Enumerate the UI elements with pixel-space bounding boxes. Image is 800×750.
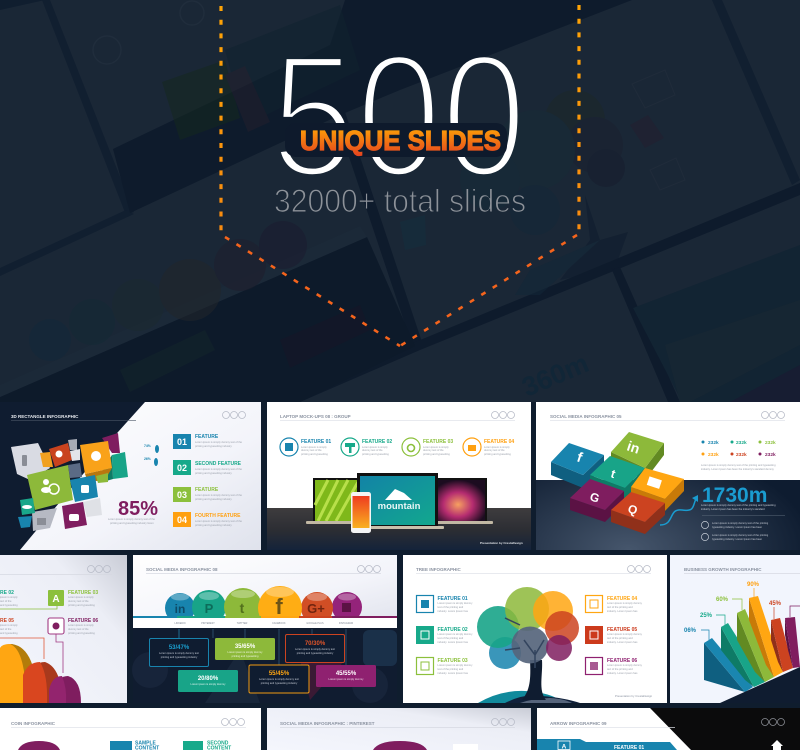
coloured rule under spheres bbox=[133, 616, 397, 628]
four feature icons: dummy text of the bbox=[423, 448, 444, 452]
numbered feature list: printing and typesetting industry. bbox=[195, 523, 232, 527]
percentage boxes with connectors: Lorem ipsum is simply dummy bbox=[329, 677, 364, 681]
slide: social media infographic 05: SOCIAL MEDIA INFOGRAPHIC 05 bbox=[550, 414, 622, 419]
slide: pinterest infographic: SOCIAL MEDIA INFOGRAPHIC : PINTEREST bbox=[280, 721, 375, 726]
four feature icons: printing and typesetting bbox=[423, 452, 450, 456]
stat values grid: 232k bbox=[708, 452, 719, 458]
faint icons in dark area bbox=[132, 630, 397, 703]
slide: 3D rectangle infographic: printing and typesetting industry lorem bbox=[110, 521, 154, 525]
slide: social media infographic 08: PINTEREST bbox=[201, 622, 215, 625]
isometric social blocks: G bbox=[588, 490, 601, 506]
right features: text of the printing and bbox=[607, 605, 633, 609]
slide: cropped features with 3D arcs: printing and typesetting bbox=[68, 603, 95, 607]
slide: cropped features with 3D arcs: and typesetting bbox=[0, 631, 18, 635]
numbered feature list bbox=[173, 434, 243, 527]
slide: social media infographic 05: Lorem ipsum is simply dummy text of the printing and typesetting bbox=[701, 503, 776, 507]
laptops and phone: mountain bbox=[378, 501, 421, 512]
slide: business growth infographic bbox=[670, 555, 800, 703]
left features: FEATURE 02 bbox=[438, 627, 468, 633]
four feature icons: FEATURE 04 bbox=[484, 439, 514, 445]
tree illustration bbox=[477, 587, 580, 703]
numbered feature list: 04 bbox=[177, 515, 187, 525]
big stat 1730m: 1730m bbox=[702, 484, 767, 507]
four feature icons: printing and typesetting bbox=[484, 452, 511, 456]
growth labels: 45% bbox=[769, 601, 782, 607]
right features: Lorem ipsum is simply dummy bbox=[607, 601, 643, 605]
left features bbox=[416, 596, 473, 675]
left features: industry. Lorem Ipsum has bbox=[438, 609, 469, 613]
right features: industry. Lorem Ipsum has bbox=[607, 671, 638, 675]
numbered feature list: FEATURE bbox=[195, 487, 219, 493]
percentage boxes with connectors: 55/45% bbox=[269, 671, 290, 677]
left features: FEATURE 03 bbox=[438, 658, 468, 664]
four feature icons: FEATURE 03 bbox=[423, 439, 453, 445]
right features bbox=[585, 596, 643, 675]
numbered feature list: printing and typesetting industry. bbox=[195, 497, 232, 501]
slide: social media infographic 08: INSTAGRAM bbox=[339, 622, 353, 625]
slide: cropped features with 3D arcs: printing and typesetting bbox=[68, 631, 95, 635]
slide: laptop mock-ups: LAPTOP MOCK-UPS 08 : GROUP bbox=[280, 414, 351, 419]
background right slide bbox=[634, 246, 799, 385]
right features: industry. Lorem Ipsum has bbox=[607, 609, 638, 613]
slide: social media infographic 05: Lorem ipsum is simply dummy text of the printing and typesetting bbox=[701, 463, 776, 467]
slide: cropped features with 3D arcs: text of the bbox=[0, 627, 12, 631]
glossy social spheres: G+ bbox=[307, 601, 325, 616]
right features: Lorem ipsum is simply dummy bbox=[607, 632, 643, 636]
stat values grid: 232k bbox=[765, 440, 776, 446]
numbered feature list: printing and typesetting industry. bbox=[195, 471, 232, 475]
right features: FEATURE 05 bbox=[607, 627, 637, 633]
slide: social media infographic 05: industry. Lorem Ipsum has been the industry's standard bbox=[701, 507, 765, 511]
background: dimmed tilted slides collage bbox=[0, 0, 800, 403]
percentage boxes with connectors: 20/80% bbox=[198, 676, 219, 682]
percentage boxes with connectors: Lorem ipsum is simply dummy bbox=[191, 682, 226, 686]
numbered feature list: SECOND FEATURE bbox=[195, 461, 242, 467]
numbered feature list: Lorem ipsum is simply dummy text of the bbox=[195, 440, 243, 444]
slide: coin infographic: SECOND bbox=[207, 740, 229, 746]
four feature icons: dummy text of the bbox=[362, 448, 383, 452]
slide: laptop mock-ups bbox=[267, 402, 531, 550]
background label: 360m: 360m bbox=[518, 348, 593, 403]
badge: unique slides: UNIQUE SLIDES bbox=[300, 125, 501, 156]
slide: cropped features with 3D arcs: RE 05 bbox=[0, 618, 14, 624]
slide: social media infographic 08: FACEBOOK bbox=[272, 622, 286, 625]
big number 500: 500 bbox=[271, 17, 526, 213]
glossy social spheres: in bbox=[175, 602, 185, 616]
numbered feature list: Lorem ipsum is simply dummy text of the bbox=[195, 467, 243, 471]
slide: cropped features with 3D arcs: and typesetting bbox=[0, 603, 18, 607]
numbered feature list: Lorem ipsum is simply dummy text of the bbox=[195, 519, 243, 523]
slide: coin infographic bbox=[0, 708, 261, 750]
glossy social spheres: f bbox=[275, 594, 283, 619]
background dim accents bbox=[162, 60, 270, 321]
slide: arrow infographic: ARROW INFOGRAPHIC 09 bbox=[550, 721, 607, 726]
background faint icon circles bbox=[93, 1, 204, 64]
numbered feature list: 03 bbox=[177, 490, 187, 500]
stats with person icons: 74% bbox=[144, 444, 151, 448]
stat values grid: 232k bbox=[708, 440, 719, 446]
left features: FEATURE 01 bbox=[438, 596, 468, 602]
glossy social spheres bbox=[165, 586, 362, 616]
percentage boxes with connectors: printing and typesetting bbox=[232, 654, 259, 658]
four feature icons bbox=[280, 438, 514, 456]
numbered feature list: Lorem ipsum is simply dummy text of the bbox=[195, 493, 243, 497]
right features: Lorem ipsum is simply dummy bbox=[607, 663, 643, 667]
right features: text of the printing and bbox=[607, 667, 633, 671]
slide: tree infographic bbox=[403, 555, 667, 703]
left features: Lorem ipsum is simply dummy bbox=[438, 632, 473, 636]
slide: pinterest infographic bbox=[267, 708, 531, 750]
slide: social media infographic 08: GOOGLE PLUS bbox=[306, 622, 324, 625]
four feature icons: FEATURE 02 bbox=[362, 439, 392, 445]
slide: social media infographic 05: Lorem ipsum is simply dummy text of the printing bbox=[712, 533, 769, 537]
four feature icons: dummy text of the bbox=[484, 448, 505, 452]
stat values grid: 232k bbox=[736, 440, 747, 446]
growth labels bbox=[684, 582, 800, 640]
slide: tree infographic: TREE INFOGRAPHIC bbox=[416, 567, 462, 572]
slide: cropped features with 3D arcs: text of the bbox=[0, 599, 12, 603]
left features: text of the printing and bbox=[438, 636, 464, 640]
right features: FEATURE 04 bbox=[607, 596, 637, 602]
growth labels: 90% bbox=[747, 582, 760, 588]
percentage boxes with connectors: Lorem ipsum is simply dummy text bbox=[295, 647, 335, 651]
right features: industry. Lorem Ipsum has bbox=[607, 640, 638, 644]
left features: text of the printing and bbox=[438, 605, 464, 609]
four feature icons: Lorem ipsum is simply bbox=[301, 445, 327, 449]
percentage boxes with connectors: Lorem ipsum is simply dummy text bbox=[259, 677, 299, 681]
percentage boxes with connectors: 45/55% bbox=[336, 671, 357, 677]
growth labels: 06% bbox=[684, 628, 697, 634]
slide: cropped features with 3D arcs: ipsum is simply bbox=[0, 595, 18, 599]
isometric social blocks: t bbox=[609, 467, 617, 481]
left features: industry. Lorem Ipsum has bbox=[438, 640, 469, 644]
four feature icons: Lorem ipsum is simply bbox=[484, 445, 510, 449]
growth labels: 25% bbox=[700, 613, 713, 619]
right features: FEATURE 06 bbox=[607, 658, 637, 664]
slide: business growth infographic: BUSINESS GROWTH INFOGRAPHIC bbox=[684, 567, 762, 572]
slide: social media infographic 08 bbox=[132, 555, 397, 703]
laptops and phone bbox=[306, 473, 493, 533]
slide: cropped features with 3D arcs: dummy text of the bbox=[68, 627, 89, 631]
numbered feature list: 02 bbox=[177, 463, 187, 473]
slide: social media infographic 08: LINKEDIN bbox=[174, 622, 186, 625]
slide: social media infographic 05: industry. Lorem Ipsum has been the industry's standard dummy bbox=[701, 467, 775, 471]
3D growth bars bbox=[704, 596, 800, 692]
left features: text of the printing and bbox=[438, 667, 464, 671]
stats with person icons bbox=[144, 444, 159, 466]
slide: cropped features with 3D arcs: Lorem ipsum is simply bbox=[68, 595, 94, 599]
four feature icons: printing and typesetting bbox=[362, 452, 389, 456]
slide: cropped features with 3D arcs: Lorem ipsum is simply bbox=[68, 623, 94, 627]
slide: cropped features with 3D arcs: dummy text of the bbox=[68, 599, 89, 603]
percentage boxes with connectors: printing and typesetting industry bbox=[261, 681, 298, 685]
slide: social media infographic 08: SOCIAL MEDIA INFOGRAPHIC 08 bbox=[146, 567, 218, 572]
stat values grid bbox=[702, 440, 776, 458]
glossy social spheres: t bbox=[240, 600, 245, 616]
slide: 3D rectangle infographic bbox=[0, 402, 261, 550]
percentage boxes with connectors: 70/30% bbox=[305, 641, 326, 647]
stat values grid: 232k bbox=[765, 452, 776, 458]
slide: coin infographic: COIN INFOGRAPHIC bbox=[11, 721, 56, 726]
numbered feature list: FOURTH FEATURE bbox=[195, 513, 241, 519]
slide: social media infographic 05: typesetting industry. Lorem Ipsum has been bbox=[712, 537, 763, 541]
slide: laptop mock-ups: Presentation by CrestaDesign bbox=[480, 541, 523, 545]
left features: industry. Lorem Ipsum has bbox=[438, 671, 469, 675]
slide: coin infographic: SAMPLE bbox=[135, 740, 156, 746]
four feature icons: printing and typesetting bbox=[301, 452, 328, 456]
dashed shield outline bbox=[221, 5, 579, 346]
right features: text of the printing and bbox=[607, 636, 633, 640]
numbered feature list: 01 bbox=[177, 437, 187, 447]
growth arrow bbox=[660, 495, 698, 525]
slide: cropped features with 3D arcs: RE 02 bbox=[0, 590, 14, 596]
stat values grid: 232k bbox=[736, 452, 747, 458]
slide: arrow infographic bbox=[537, 708, 800, 750]
numbered feature list: FEATURE bbox=[195, 434, 219, 440]
slide: cropped features with 3D arcs: FEATURE 03 bbox=[68, 590, 98, 596]
percentage boxes with connectors: 35/65% bbox=[235, 644, 256, 650]
big stat 85%: 85% bbox=[118, 498, 158, 520]
slide: cropped features with 3D arcs: ipsum is simply bbox=[0, 623, 18, 627]
bottom row of cropped slides bbox=[0, 708, 800, 750]
slide: 3D rectangle infographic: Lorem ipsum is simply dummy text of the bbox=[108, 517, 156, 521]
numbered feature list: printing and typesetting industry. bbox=[195, 444, 232, 448]
percentage boxes with connectors: 53/47% bbox=[169, 645, 190, 651]
slide: social media infographic 05: typesetting industry. Lorem Ipsum has been bbox=[712, 525, 763, 529]
growth labels: 60% bbox=[716, 597, 729, 603]
percentage boxes with connectors: Lorem ipsum is simply dummy bbox=[228, 650, 263, 654]
four feature icons: Lorem ipsum is simply bbox=[362, 445, 388, 449]
slide: 3D rectangle infographic: 3D RECTANGLE INFOGRAPHIC bbox=[11, 414, 79, 419]
subtitle: 32000+ total slides bbox=[274, 183, 526, 219]
percentage boxes with connectors: Lorem ipsum is simply dummy text bbox=[159, 651, 199, 655]
four feature icons: Lorem ipsum is simply bbox=[423, 445, 449, 449]
four feature icons: dummy text of the bbox=[301, 448, 322, 452]
left features: Lorem ipsum is simply dummy bbox=[438, 663, 473, 667]
slide: social media infographic 05 bbox=[536, 402, 800, 550]
slide: cropped features with 3D arcs: A bbox=[52, 594, 60, 605]
four feature icons: FEATURE 01 bbox=[301, 439, 331, 445]
isometric social blocks: Q bbox=[626, 502, 639, 518]
slide: social media infographic 05: Lorem ipsum is simply dummy text of the printing bbox=[712, 521, 769, 525]
isometric social blocks: f bbox=[575, 449, 585, 465]
isometric social blocks: in bbox=[625, 438, 642, 457]
percentage boxes with connectors bbox=[150, 629, 376, 693]
left features: Lorem ipsum is simply dummy bbox=[438, 601, 473, 605]
slide: cropped features with 3D arcs bbox=[0, 555, 127, 703]
slide: social media infographic 08: TWITTER bbox=[237, 622, 248, 625]
percentage boxes with connectors: printing and typesetting industry bbox=[161, 655, 198, 659]
percentage boxes with connectors: printing and typesetting industry bbox=[297, 651, 334, 655]
3D arc bars bbox=[0, 644, 81, 703]
isometric social blocks bbox=[551, 432, 684, 534]
3D cubes cluster bbox=[11, 433, 128, 531]
slide: tree infographic: Presentation by CrestaDesign bbox=[615, 694, 653, 698]
stats with person icons: 26% bbox=[144, 457, 151, 461]
glossy social spheres: P bbox=[205, 601, 214, 616]
slide: cropped features with 3D arcs: FEATURE 06 bbox=[68, 618, 98, 624]
